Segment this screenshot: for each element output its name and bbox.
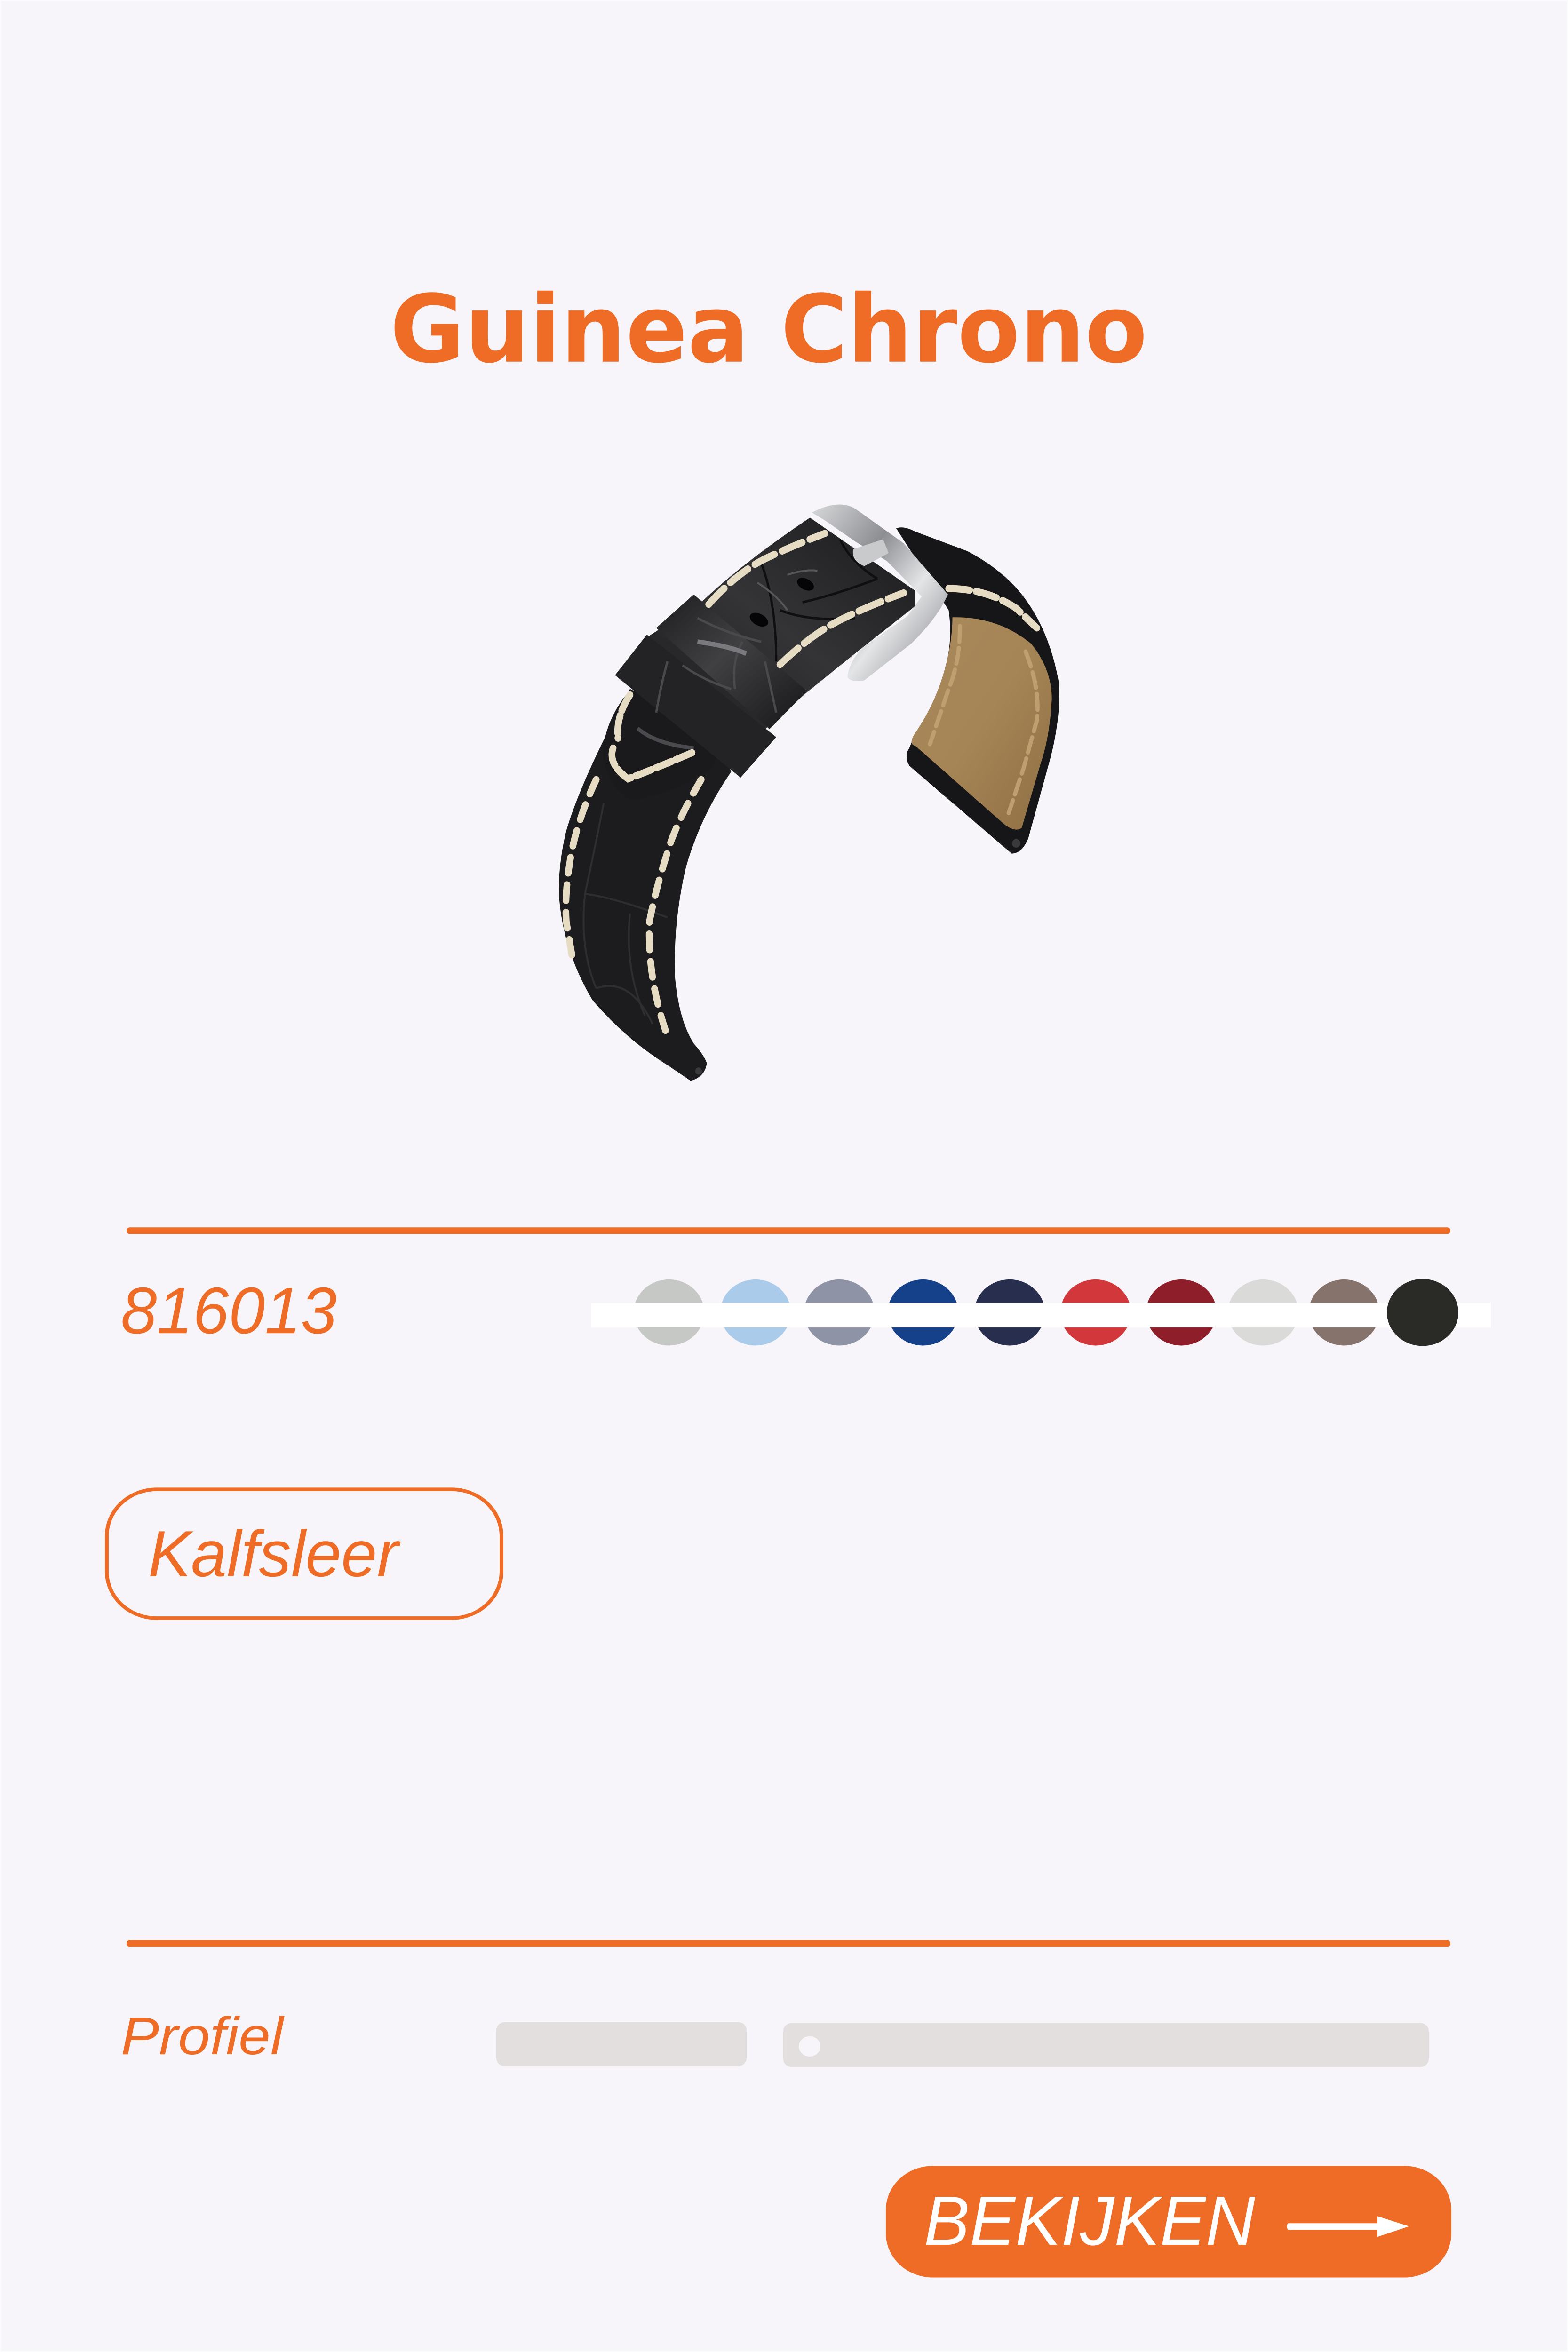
colour swatches xyxy=(591,1279,1491,1346)
long strap piece xyxy=(559,517,915,1081)
steel buckle xyxy=(812,504,948,681)
folded leather loop xyxy=(603,689,727,800)
profile label: Profiel xyxy=(121,2007,285,2066)
strap keepers xyxy=(615,595,807,778)
view button: BEKIJKEN xyxy=(924,2182,1255,2260)
upper band through keepers to buckle xyxy=(643,517,915,736)
title: Guinea Chrono xyxy=(390,275,1147,384)
product image: black leather watch strap xyxy=(559,504,1059,1081)
profile bars xyxy=(496,2022,1429,2067)
material tag: Kalfsleer xyxy=(148,1518,401,1590)
strap holes xyxy=(748,610,770,629)
article number: 816013 xyxy=(121,1274,337,1347)
material tag xyxy=(107,1489,501,1618)
short strap piece with tan lining xyxy=(896,527,1059,854)
arrow icon xyxy=(1287,2216,1409,2237)
top divider rule xyxy=(127,1227,1450,1234)
contrast stitching xyxy=(566,533,1037,1041)
view button xyxy=(886,2166,1451,2278)
bottom divider rule xyxy=(127,1940,1450,1947)
